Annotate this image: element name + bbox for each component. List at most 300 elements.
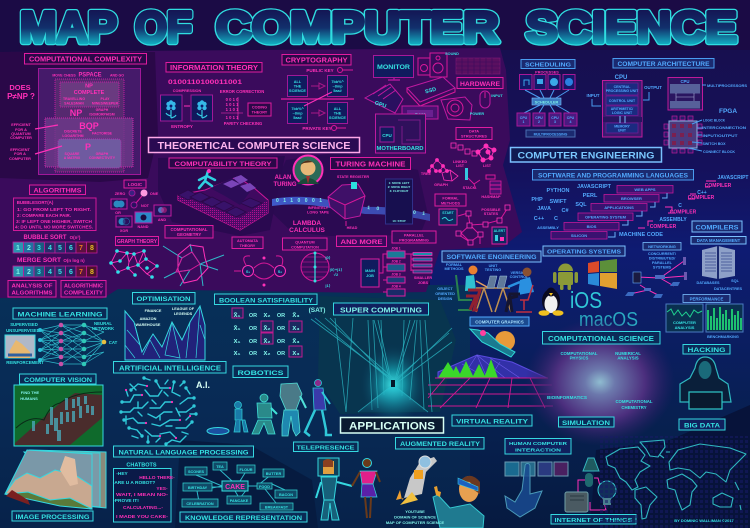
heading: augmented reality: AUGMENTED REALITY <box>400 441 481 448</box>
CPU architecture diagram: PROCESSING UNIT <box>606 89 639 93</box>
complexity class diagram: NP <box>85 84 93 90</box>
labels: methods: DESIGN <box>438 297 453 301</box>
logic formula: x₂ <box>263 350 271 357</box>
callout: efficient for a computer: EFFICIENT <box>10 148 30 152</box>
cpu cores: CPU <box>567 116 575 120</box>
bloch sphere: |1⟩ <box>325 283 331 288</box>
panel: super computing <box>311 303 452 427</box>
logic gates: ZERO <box>115 192 125 196</box>
merge sort: 3 <box>37 269 41 276</box>
complexity class diagram: SQUARE <box>65 152 80 156</box>
chat box: HELLO THERE- <box>139 475 175 481</box>
icon: windows <box>588 259 617 289</box>
network diagram <box>625 257 687 298</box>
label: infinitely long tape <box>307 206 329 214</box>
concept links <box>196 470 285 507</box>
chart: optimisation landscape <box>125 306 205 360</box>
labels: optimisation examples: LEAGUE OF <box>172 307 195 311</box>
label: infinitely long tape: INFINITELY <box>308 206 329 210</box>
logic gates: NAND <box>138 225 149 229</box>
bubble sort: 5 <box>58 245 62 252</box>
heading: automata theory: THEORY <box>240 244 256 248</box>
compile chain: COMPILER <box>650 224 677 230</box>
heading: formal methods: FORMAL <box>442 196 459 200</box>
background: theory region <box>0 48 522 299</box>
merge sort: 2 <box>27 269 31 276</box>
merge sort: MERGE SORT <box>17 258 61 264</box>
compile chain: C <box>678 203 682 209</box>
labels: methods: VERSION <box>510 271 528 275</box>
heading: data structures <box>456 128 492 140</box>
chart: benchmarking: BENCHMARKING <box>707 335 739 339</box>
icon: turing head: HEAD <box>347 226 358 230</box>
bloch sphere: |0⟩ <box>325 255 331 260</box>
panel: computer architecture <box>587 58 747 154</box>
heading: machine learning: MACHINE LEARNING <box>18 312 102 318</box>
bubble sort: 4 <box>48 245 52 252</box>
compression flowers: COMPRESSION <box>173 89 201 93</box>
icon: list graph: LIST <box>483 164 492 168</box>
panel: computational geometry <box>163 226 224 286</box>
panel: software engineering <box>435 251 541 312</box>
programming languages: SQL <box>575 202 587 208</box>
logic formula: x₂ <box>263 312 271 319</box>
brain nodes <box>119 376 198 446</box>
label: algorithmic complexity: COMPLEXITY <box>64 290 103 296</box>
icon: graph: GRAPH <box>434 183 448 187</box>
heading: natural language processing <box>114 446 254 457</box>
compile chain: C++ <box>697 190 707 196</box>
icon: linked list <box>451 143 477 168</box>
label: infinitely long tape: LONG TAPE <box>307 210 329 214</box>
heading: knowledge representation: KNOWLEDGE REPRESENTATION <box>185 516 302 522</box>
encryption boxes: THE <box>294 84 302 88</box>
chat box: -ARE U A ROBOT? <box>113 480 155 486</box>
labels: methods: TESTING <box>485 268 501 272</box>
cpu cores: 2 <box>538 120 540 124</box>
illustration: isometric staircase with climber <box>178 169 268 230</box>
icon: Alan Turing portrait <box>294 156 322 184</box>
job diagram: JOBS <box>418 281 429 285</box>
state machine <box>234 256 286 286</box>
panel: parallel programming <box>361 231 436 296</box>
heading: scheduling: SCHEDULING <box>525 62 571 68</box>
panel: graph theory <box>109 236 159 279</box>
software stack: SILICON <box>571 233 587 238</box>
heading: hardware: HARDWARE <box>460 81 500 88</box>
label: coding theory <box>248 103 271 116</box>
programming languages: PYTHON <box>547 188 569 194</box>
label: SAT: (SAT) <box>309 307 325 314</box>
text: concurrent distributed parallel systems: PARALLEL <box>652 261 673 265</box>
panel: hardware <box>365 52 503 153</box>
credit: BY DOMINIC WALLIMAN ©2017 <box>674 518 735 523</box>
chat box: -HEY <box>116 471 129 477</box>
label: coding theory: THEORY <box>252 110 268 114</box>
stack arrows <box>608 193 667 237</box>
icon: turing head <box>328 182 365 230</box>
corridor floor <box>358 386 428 412</box>
label: analysis of algorithms: ALGORITHMS <box>12 290 53 296</box>
complexity class diagram: AND GO <box>110 74 124 78</box>
chat box: YES- <box>156 486 168 492</box>
CPU architecture diagram: OUTPUT <box>644 85 662 90</box>
icon: light bulb <box>598 481 616 505</box>
text: Alan Turing: TURING <box>274 182 297 188</box>
heading: super computing <box>334 303 428 315</box>
compile chain: ASSEMBLY <box>659 217 687 223</box>
cpu cores: 3 <box>554 120 556 124</box>
text: A.I.: A.I. <box>196 380 210 390</box>
error correction matrix <box>220 89 264 126</box>
state graph: ALERT <box>494 229 506 233</box>
icon: SSD: SSD <box>425 87 437 95</box>
background: lower right dark patch <box>590 405 750 528</box>
complexity class diagram: PSPACE <box>78 72 102 78</box>
label: analysis of algorithms <box>8 280 56 297</box>
cpu cores: CPU <box>551 116 559 120</box>
complexity class diagram: ISOMORPHISM <box>89 112 115 116</box>
CPU architecture diagram: LOGIC UNIT <box>612 111 633 115</box>
heading: graph theory: GRAPH THEORY <box>117 239 158 245</box>
concept labels: FOOD <box>259 485 270 489</box>
programming languages: C++ <box>534 216 544 222</box>
CPU architecture diagram: UNIT <box>618 128 627 132</box>
labels: computational fields <box>547 351 653 410</box>
chart: computer analysis <box>666 304 703 332</box>
title: Map of Computer Science: OF <box>135 3 192 52</box>
encryption boxes: ALL <box>294 80 302 84</box>
bubble sort: 3 <box>37 245 41 252</box>
process glyphs <box>524 78 573 86</box>
infinite tape: 1 1 <box>345 202 352 208</box>
logic formula: OR <box>249 351 257 357</box>
panel: logic <box>111 180 171 233</box>
icon: power supply: POWER <box>470 112 484 116</box>
concept labels: BREAKFAST <box>265 506 289 510</box>
chart: computer analysis: ANALYSIS <box>675 325 695 330</box>
bubble sort: 1 <box>16 245 20 252</box>
text: youtube credit: MAP OF COMPUTER SCIENCE <box>386 520 445 525</box>
panel: optimisation <box>125 292 205 360</box>
icon: stack: STACK <box>463 186 476 190</box>
state graph: POSSIBLE <box>481 208 501 212</box>
icon: boston robot <box>252 394 277 434</box>
labels: databases <box>696 279 743 291</box>
encryption boxes: 7bb%^ <box>331 80 344 84</box>
state table: 1: MOVE LEFT <box>389 181 409 185</box>
encryption boxes: ALL <box>334 107 342 111</box>
chat box: WAIT, I MEAN NO- <box>116 492 168 498</box>
callout: efficient for a quantum computer <box>10 123 58 140</box>
concept nodes <box>182 462 297 510</box>
panel: robotics <box>233 366 332 436</box>
complexity class diagram: FACTORISE <box>92 132 113 136</box>
icon: toaster <box>565 492 588 512</box>
merge sort: 5 <box>58 269 62 276</box>
complexity class diagram: MOVE CHESS <box>52 74 76 78</box>
panel: virtual reality <box>428 355 553 426</box>
encryption boxes: 7bb%^ <box>291 107 304 111</box>
logic gates: OR <box>115 211 121 215</box>
complexity class diagram: P <box>85 142 91 152</box>
CPU architecture diagram: CPU <box>615 75 627 81</box>
label: and more: AND MORE <box>340 239 383 246</box>
labels: methods: FORMAL <box>446 263 463 267</box>
labels: computational fields: NUMERICAL <box>615 351 641 356</box>
text: concurrent distributed parallel systems: SYSTEMS <box>653 266 672 270</box>
bloch sphere <box>301 252 343 288</box>
panel: image processing <box>5 450 106 521</box>
background: engineering side <box>430 50 750 528</box>
job diagram: JOB 4 <box>391 284 401 288</box>
state table: 3: FLIP DIGIT <box>390 189 409 193</box>
icon: hashmap: HASHMAP <box>481 195 501 199</box>
software stack: BIOS <box>587 224 597 229</box>
voronoi diagram <box>163 244 224 286</box>
wiring <box>578 478 606 510</box>
icon: woman <box>352 458 380 518</box>
heading: big data <box>679 419 725 430</box>
FPGA diagram: CONNECT BLOCK <box>703 150 735 154</box>
software stack: OPERATING SYSTEM <box>585 214 627 220</box>
labels: methods: METHODS <box>444 267 464 271</box>
heading: applications: APPLICATIONS <box>349 420 435 432</box>
title: Map of Computer Science: MAP <box>20 3 117 52</box>
logic formula: x̄₃ <box>292 337 300 345</box>
heading: human computer interaction: INTERACTION <box>515 448 562 454</box>
panel: quantum computation <box>282 238 343 288</box>
compile chain: COMPILER <box>705 183 732 189</box>
title: Map of Computer Science <box>20 3 737 52</box>
text: does P not equal NP: P≠NP ? <box>7 92 35 101</box>
software stack: APPLICATIONS <box>604 205 634 210</box>
panel: computer graphics <box>470 317 529 357</box>
logic formula: OR <box>249 339 257 345</box>
infinite tape: 1001001 <box>367 205 425 217</box>
complexity class diagram: PLAY <box>100 97 110 101</box>
concept labels: BUTTER <box>266 472 281 476</box>
heading: virtual reality: VIRTUAL REALITY <box>456 418 529 426</box>
CPU architecture diagram: CENTRAL <box>614 85 631 89</box>
labels: optimisation examples: AMAZON <box>140 317 157 321</box>
background: complexity dark patch <box>0 52 158 182</box>
bloch sphere: √2 <box>334 272 339 277</box>
icon: motherboard <box>376 114 426 153</box>
label: analysis of algorithms: ANALYSIS OF <box>12 284 53 290</box>
logic formula: x₁ <box>234 350 240 357</box>
logic formula: x₁ <box>234 338 240 345</box>
text: lambda calculus: LAMBDA <box>293 220 321 227</box>
heading: data structures: STRUCTURES <box>461 134 487 138</box>
callout: efficient for a quantum computer: QUANTUM <box>11 132 31 136</box>
encryption boxes <box>281 76 354 124</box>
logic gates <box>111 190 171 233</box>
heading: software and programming languages: SOFTWARE AND PROGRAMMING LANGUAGES <box>538 172 689 180</box>
programming languages: C <box>554 216 558 222</box>
state table <box>386 179 412 224</box>
complexity class diagram: NP <box>70 108 82 118</box>
heading: software engineering: SOFTWARE ENGINEERING <box>446 254 536 261</box>
logic formula: x̄₁ <box>234 324 240 332</box>
panel: cryptography <box>281 54 354 131</box>
public key: PUBLIC KEY <box>306 68 334 73</box>
scene: find the humans: HUMANS <box>20 396 38 401</box>
compiler arrows <box>638 181 716 228</box>
CPU architecture diagram: MEMORY <box>614 124 630 128</box>
state machine: S₂ <box>278 269 282 274</box>
labels: learning types <box>6 322 40 333</box>
merge sort: O(n log n) <box>63 258 85 263</box>
label: multiprocessing: MULTIPROCESSING <box>534 132 568 136</box>
process icons <box>520 74 575 90</box>
panel: data management <box>691 236 746 291</box>
heading: parallel programming: PROGRAMMING <box>399 238 429 242</box>
merge sort: 8 <box>90 269 94 276</box>
CPU architecture diagram: CONTROL UNIT <box>609 99 636 103</box>
panel: boolean satisfiability <box>214 294 325 357</box>
error correction matrix: 1 0 1 1 <box>226 102 239 107</box>
icon: linked list: LINKED <box>453 160 467 164</box>
heading: parallel programming: PARALLEL <box>404 234 425 238</box>
compile chain: COMPILER <box>670 210 697 216</box>
private key: PRIVATE KEY <box>302 126 332 131</box>
heading: data structures: DATA <box>469 130 479 134</box>
heading: computer graphics: COMPUTER GRAPHICS <box>475 320 524 324</box>
logic gates: AND <box>158 218 166 222</box>
software stack: BROWSER <box>621 196 642 201</box>
heading: logic: LOGIC <box>128 182 143 187</box>
labels: methods: ORIENTED <box>435 292 455 296</box>
software stack <box>551 186 673 239</box>
complexity class diagram <box>38 68 140 174</box>
programming languages: ASSEMBLY <box>537 225 559 230</box>
heading: networking: NETWORKING <box>648 244 676 249</box>
logic gates: XOR <box>120 229 128 233</box>
labels: optimisation examples <box>136 307 195 327</box>
concept labels: PANCAKE <box>230 499 249 503</box>
panel: computational science <box>525 318 675 446</box>
background: supercomputer teal patch <box>318 296 456 414</box>
bubble sort: 6 <box>69 245 73 252</box>
programming languages: JAVA <box>537 206 551 212</box>
chat box: I MADE YOU CAKE- <box>116 514 168 520</box>
state machine: S₁ <box>246 269 251 274</box>
heading: formal methods: METHODS <box>441 202 460 206</box>
logic formula: OR <box>277 351 285 357</box>
heading: computational complexity: COMPUTATIONAL COMPLEXITY <box>29 55 142 64</box>
corridor door <box>391 380 395 387</box>
heading: computational geometry: GEOMETRY <box>177 232 201 237</box>
job diagram: JOB 3 <box>391 272 401 276</box>
binary string: 0100110100011001 <box>168 79 242 86</box>
icon: data centre <box>702 246 735 279</box>
panel: telepresence <box>294 442 380 520</box>
title: Map of Computer Science: SCIENCE <box>526 3 737 52</box>
concept labels: SCONES <box>188 470 204 474</box>
heading: computer engineering <box>510 148 662 162</box>
label: compilers <box>692 221 742 232</box>
heading: computational science: COMPUTATIONAL SCIENCE <box>548 334 654 343</box>
heading: artificial intelligence: ARTIFICIAL INTELLIGENCE <box>119 366 221 372</box>
label: algorithmic complexity: ALGORITHMIC <box>64 284 103 290</box>
concept labels: BACON <box>279 493 293 497</box>
layered image <box>5 450 106 509</box>
panel: formal methods <box>435 194 510 245</box>
job diagram: SMALLER <box>414 276 432 280</box>
heading: information theory: INFORMATION THEORY <box>170 65 258 72</box>
labels: computational fields: BIOINFORMATICS <box>547 395 587 400</box>
icon: cat photo <box>5 335 35 358</box>
labels: optimisation examples: WAREHOUSE <box>136 323 161 327</box>
infinite tape <box>272 197 430 221</box>
job diagram: JOB 2 <box>391 260 401 264</box>
text: does P not equal NP: DOES <box>9 83 31 92</box>
panel: information theory <box>160 62 271 129</box>
concept labels: FLOUR <box>239 468 253 472</box>
panel: machine learning <box>5 308 118 366</box>
illustration: programmers at a table <box>456 266 534 312</box>
title: Map of Computer Science: OF <box>135 3 192 52</box>
compile chain: MACHINE CODE <box>619 232 664 238</box>
label: coding theory: CODING <box>252 106 267 110</box>
heading: automata theory: AUTOMATA <box>237 239 258 243</box>
labels: optimisation examples: LEGENDS <box>174 312 193 316</box>
logic formula: x̄₃ <box>292 311 300 319</box>
encryption boxes: 5aa# <box>333 89 343 93</box>
icon: tux <box>538 288 564 316</box>
heading: computability theory <box>169 158 277 168</box>
heading: computational geometry <box>165 226 213 238</box>
text: youtube credit <box>386 509 445 525</box>
chat box: CALCULATING...- <box>123 505 163 511</box>
callout: efficient for a computer: FOR A <box>14 152 26 156</box>
title: Map of Computer Science: COMPUTER <box>216 3 499 52</box>
icon: running figure <box>199 169 215 188</box>
icon: sun <box>495 331 515 351</box>
concept node: cake: CAKE <box>225 484 245 491</box>
encryption boxes: 5aa# <box>293 116 303 120</box>
state table: 10: STOP <box>392 219 406 223</box>
background: applications lower left <box>0 285 470 528</box>
illustration: circuit brain <box>121 378 196 444</box>
icon: speakers <box>418 53 447 77</box>
FPGA diagram <box>664 108 746 154</box>
CPU architecture diagram: ARITHMETIC/ <box>611 107 633 111</box>
programming languages: PHP <box>531 197 543 203</box>
icon: humanoid robot <box>305 380 332 436</box>
text: concurrent distributed parallel systems: CONCURRENT/ <box>648 252 677 256</box>
state graph <box>439 205 510 245</box>
icon: telepresence robot <box>316 458 352 520</box>
error correction matrix: 1 0 1 1 <box>226 115 239 120</box>
labels: databases: SQL <box>731 279 740 283</box>
merge sort: 1 <box>16 269 20 276</box>
complexity class diagram: BQP <box>79 121 99 131</box>
panel: computer vision <box>14 374 103 446</box>
encryption boxes: ~8mp <box>292 112 303 116</box>
callout: efficient for a quantum computer: FOR A <box>15 128 27 132</box>
complexity class diagram: DISCRETE <box>64 130 83 134</box>
bubble sort pseudocode: 4: DO UNTIL NO MORE SWITCHES. <box>15 224 93 230</box>
icon: monitor: MONITOR <box>377 64 410 71</box>
heading: algorithms: ALGORITHMS <box>34 188 82 194</box>
labels: methods: CONTROL <box>510 275 529 279</box>
network graph <box>109 249 159 279</box>
panel: internet of things <box>551 458 636 524</box>
logic formula: x̄₁ <box>234 311 240 319</box>
panel: knowledge representation <box>180 462 307 522</box>
